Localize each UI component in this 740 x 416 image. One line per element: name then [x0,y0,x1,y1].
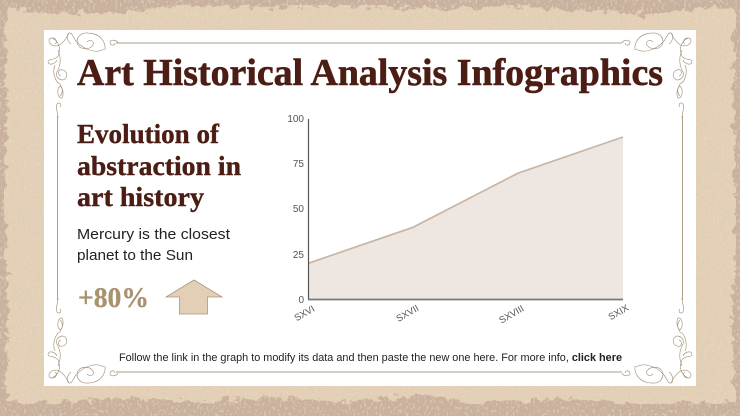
y axis labels: 75 [293,159,304,170]
corner ornament top-right [622,33,692,118]
statistic +80%: +80% [78,283,149,314]
corner ornament bottom-right [622,298,692,383]
x axis labels: SXVIII [497,303,526,326]
y axis labels [287,114,304,306]
chart area [308,137,623,300]
x axis labels [293,302,631,326]
description text: Mercury is the closest [77,226,231,243]
y axis labels: 0 [298,295,304,306]
subtitle heading: abstraction in [77,151,241,181]
subtitle heading [77,119,241,212]
y axis labels: 25 [293,250,304,261]
corner ornament bottom-left [48,298,118,383]
corner ornament top-left [48,33,118,118]
white card [44,30,696,386]
x axis labels: SXVII [394,303,421,325]
description text: planet to the Sun [77,247,193,264]
description text [77,226,231,264]
chart axes [308,119,310,300]
title: Art Historical Analysis Infographics [77,52,663,94]
x axis labels: SXIX [607,302,631,323]
chart line [308,137,623,263]
x axis labels: SXVI [293,304,317,324]
subtitle heading: Evolution of [77,119,220,149]
footer note: Follow the link in the graph to modify its data and then paste the new one here. For more info, click here [119,352,622,364]
y axis labels: 50 [293,204,304,215]
y axis labels: 100 [287,114,304,125]
subtitle heading: art history [77,182,205,212]
